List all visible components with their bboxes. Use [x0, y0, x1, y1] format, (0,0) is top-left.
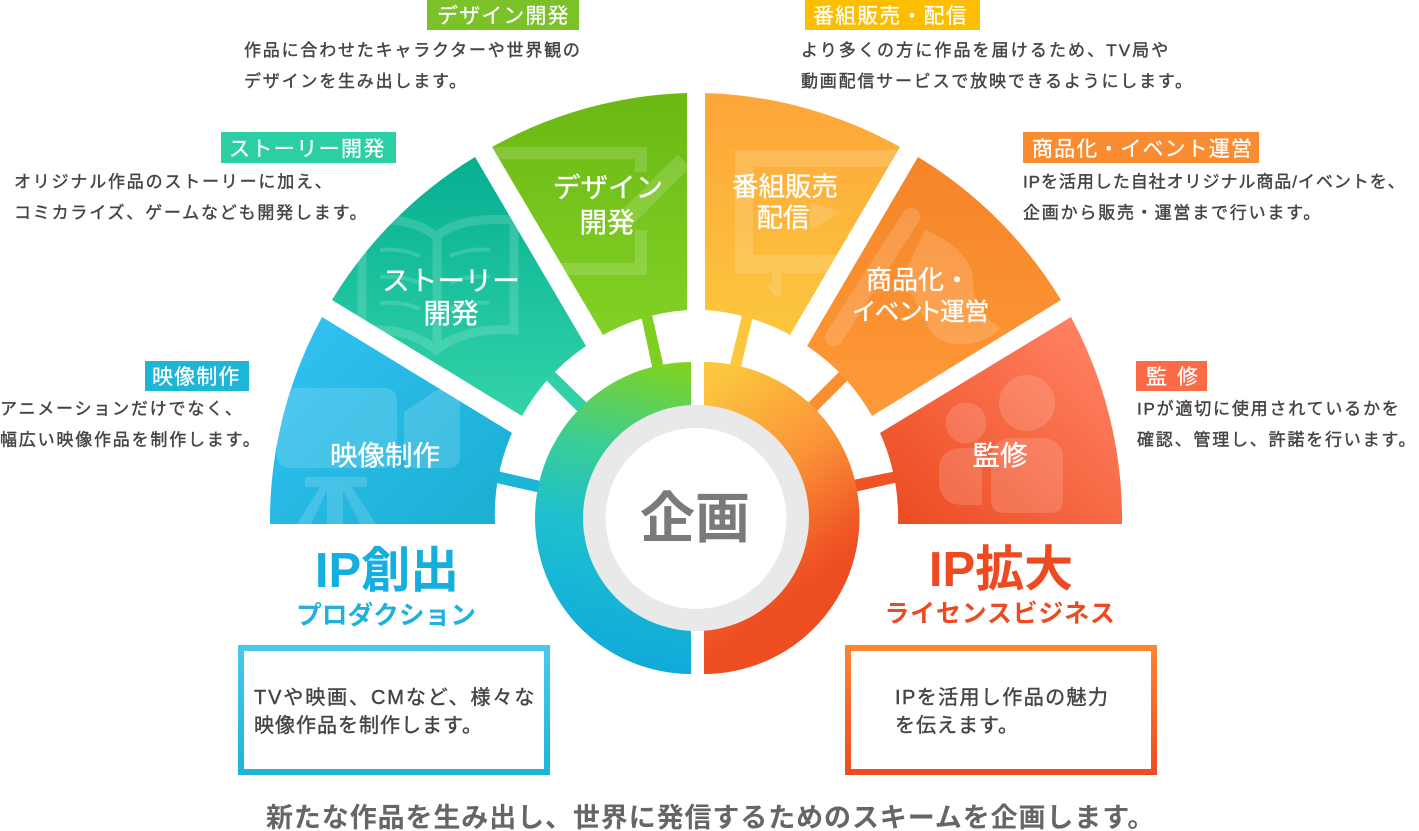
tag and text: merchandise and events: 商品化・イベント運営: [1032, 138, 1253, 161]
callout box: licensing: IPを活用し作品の魅力: [895, 686, 1109, 709]
label: design segment: [553, 172, 663, 238]
label: video segment: 映像制作: [330, 440, 440, 471]
label: broadcast segment: 配信: [756, 203, 810, 233]
tag and text: story development: [14, 132, 396, 222]
label: story segment: [382, 265, 520, 329]
tag and text: story development: コミカライズ、ゲームなども開発します。: [14, 204, 368, 222]
segment: video: [270, 317, 512, 524]
callout box: production: [241, 648, 547, 772]
tag and text: broadcast sales: より多くの方に作品を届けるため、TV局や: [801, 41, 1170, 60]
icon: two people: [939, 375, 1063, 513]
heading: IP creation: [296, 544, 476, 630]
icon: tablet and pen: [490, 153, 684, 269]
label: story segment: ストーリー: [382, 265, 520, 296]
center circle: planning: [583, 405, 809, 631]
callout box: licensing: を伝えます。: [895, 714, 1019, 737]
tag and text: supervision: 監: [1146, 366, 1168, 389]
tag and text: broadcast sales: [801, 0, 1194, 91]
icon: monitor with play button: [735, 150, 900, 297]
icon: merchandise shape: [834, 217, 1001, 344]
tag and text: supervision: IPが適切に使用されているかを: [1137, 398, 1401, 418]
connector: video to ring: [492, 470, 545, 494]
label: merchandise segment: [853, 265, 989, 326]
label: story segment: 開発: [424, 298, 478, 329]
label: broadcast segment: [732, 172, 838, 233]
ring: left half, production: [535, 362, 691, 674]
segment: supervision: [880, 317, 1122, 524]
label: merchandise segment: 商品化・: [866, 265, 970, 295]
tag and text: supervision: 修: [1177, 366, 1199, 389]
tag and text: broadcast sales: 番組販売・配信: [813, 5, 968, 28]
label: supervision segment: 監修: [972, 440, 1028, 471]
tag and text: video production: アニメーションだけでなく、: [0, 400, 244, 418]
connector: supervision to ring: [848, 471, 899, 493]
label: design segment: 開発: [580, 207, 634, 238]
icon: film camera: [277, 388, 460, 524]
tag and text: merchandise and events: 企画から販売・運営まで行います。: [1023, 204, 1322, 222]
tag and text: design development: [244, 0, 582, 91]
connector: broadcast to ring: [729, 311, 753, 371]
tag and text: broadcast sales: 動画配信サービスで放映できるようにします。: [801, 72, 1194, 91]
heading: IP creation: プロダクション: [296, 600, 476, 630]
tag and text: supervision: [1136, 361, 1417, 450]
callout box: licensing: [848, 648, 1154, 772]
segment: design: [490, 93, 687, 335]
tag and text: merchandise and events: [1023, 132, 1406, 222]
heading: IP expansion: ライセンスビジネス: [884, 600, 1116, 628]
tag and text: design development: デザイン開発: [437, 5, 570, 28]
label: broadcast segment: 番組販売: [732, 172, 838, 202]
segment: broadcast and distribution: [705, 93, 900, 335]
tag and text: video production: 映像制作: [152, 366, 240, 389]
label: design segment: デザイン: [553, 172, 663, 203]
tag and text: design development: 作品に合わせたキャラクターや世界観の: [244, 41, 582, 60]
heading: IP expansion: IP拡大: [929, 543, 1073, 597]
tag and text: supervision: 確認、管理し、許諾を行います。: [1137, 430, 1417, 450]
tag and text: design development: デザインを生み出します。: [244, 71, 468, 91]
tag and text: story development: オリジナル作品のストーリーに加え、: [14, 172, 334, 192]
heading: IP creation: IP創出: [315, 544, 459, 598]
tag and text: video production: 幅広い映像作品を制作します。: [0, 430, 262, 450]
center label: 企画: [640, 488, 750, 550]
tag and text: story development: ストーリー開発: [229, 138, 386, 161]
callout box: production: TVや映画、CMなど、様々な: [254, 686, 536, 709]
tag and text: video production: [0, 361, 262, 450]
connector: story to ring: [545, 371, 590, 415]
segment: merchandise and events: [807, 157, 1061, 416]
tag and text: merchandise and events: IPを活用した自社オリジナル商品/イベントを、: [1023, 172, 1406, 192]
connector: design to ring: [641, 312, 664, 373]
segment: story: [332, 157, 586, 416]
connector: merchandise to ring: [804, 370, 849, 415]
callout box: production: 映像作品を制作します。: [254, 714, 483, 737]
icon: open book: [362, 219, 514, 350]
ring: right half, licensing: [704, 362, 860, 674]
heading: IP expansion: [884, 543, 1116, 628]
label: merchandise segment: イベント運営: [853, 298, 989, 326]
